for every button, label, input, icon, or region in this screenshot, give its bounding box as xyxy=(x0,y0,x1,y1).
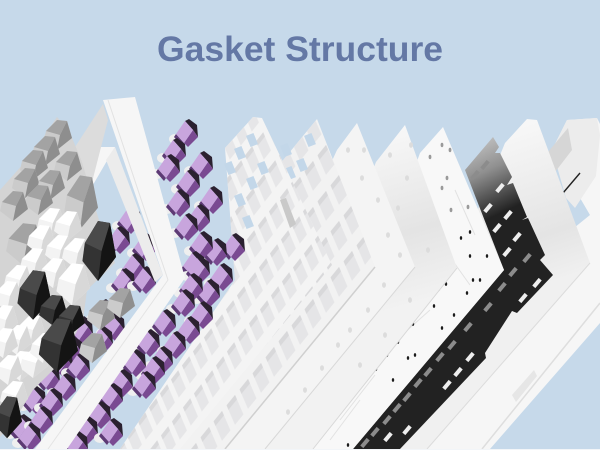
switches behind the frame xyxy=(59,119,245,450)
keycaps xyxy=(0,117,135,438)
layer: perforated plate xyxy=(200,123,415,449)
layer: white plate xyxy=(380,119,590,449)
layer: PCB xyxy=(313,127,504,449)
layer: foam xyxy=(265,125,457,449)
layer: switch plate rear xyxy=(150,119,375,449)
white keycaps xyxy=(0,208,90,411)
layer: bottom case xyxy=(300,118,600,449)
grey keycaps xyxy=(0,120,135,363)
exploded keyboard xyxy=(0,97,600,450)
bottom edge strip xyxy=(0,449,600,450)
keycap mass xyxy=(0,117,115,437)
black keycaps xyxy=(0,221,116,438)
layer: switch plate front xyxy=(120,117,332,449)
switches inside the frame opening xyxy=(4,206,156,450)
top case frame xyxy=(0,97,185,449)
title: Gasket Structure xyxy=(157,30,443,69)
layer: black sound pad xyxy=(353,137,553,449)
